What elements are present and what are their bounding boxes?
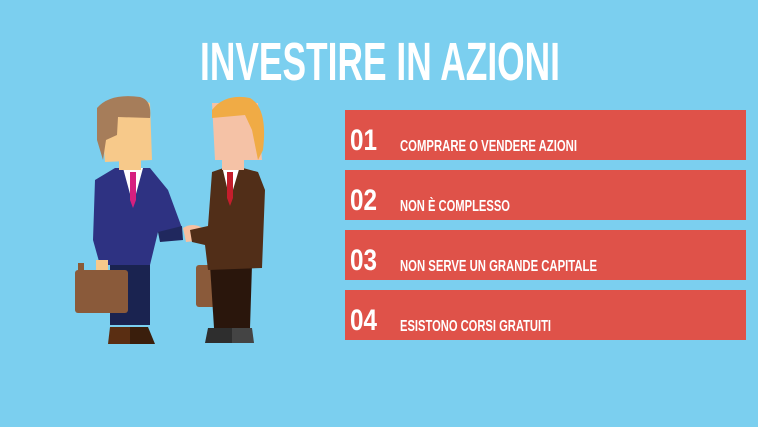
item bar 03: 03 <box>350 244 377 277</box>
item bar 01: COMPRARE O VENDERE AZIONI <box>400 138 577 155</box>
item bar 02 <box>345 170 746 220</box>
figure: right businessman <box>190 97 265 343</box>
item bar 03: NON SERVE UN GRANDE CAPITALE <box>400 258 597 275</box>
title: INVESTIRE IN AZIONI <box>200 32 560 92</box>
figure: left businessman <box>75 96 205 344</box>
item bar 02: 02 <box>350 184 377 217</box>
item bar 04 <box>345 290 746 340</box>
illustration: handshake <box>75 96 265 344</box>
item bar 01 <box>345 110 746 160</box>
item bar 02: NON È COMPLESSO <box>400 196 510 215</box>
item bar 03 <box>345 230 746 280</box>
item bar 04: 04 <box>350 304 377 337</box>
item bar 04: ESISTONO CORSI GRATUITI <box>400 318 551 335</box>
hands <box>183 225 205 242</box>
item bar 01: 01 <box>350 124 377 157</box>
